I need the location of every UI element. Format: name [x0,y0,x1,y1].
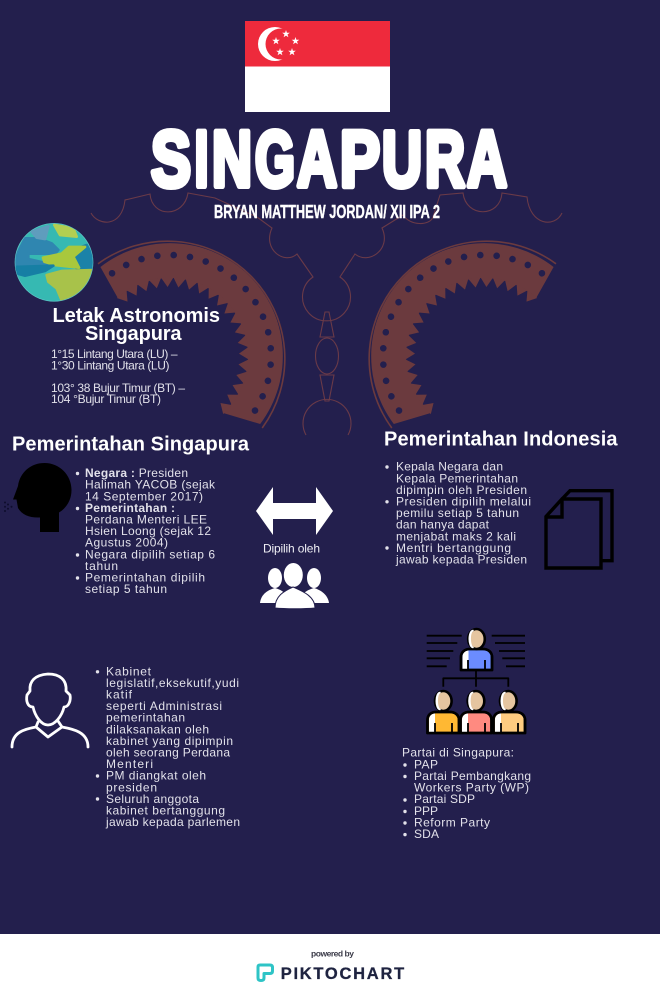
right person [494,691,525,733]
list: Singapore government: Negara dipilih setiap 6 [85,547,215,561]
list: Indonesian government: menjabat maks 2 kali [396,529,516,543]
list: Singapore government: Agustus 2004) [85,536,168,550]
title: A [297,114,337,203]
icon: head silhouette [4,463,72,532]
list: cabinet: Menteri [106,757,153,771]
list: Singapore government: Negara : Presiden [85,466,188,480]
list: Indonesian government: Mentri bertanggung [396,541,511,555]
footer [0,934,660,1000]
list: Singapore government: Hsien Loong (sejak 12 [85,524,211,538]
list: Indonesian government [385,460,531,566]
list: parties in Singapore: Partai SDP [414,792,475,806]
icon: documents [546,491,612,568]
list: Singapore government: Pemerintahan dipilih [85,571,205,585]
heading: Letak Astronomis: Letak Astronomis [52,305,220,327]
text: astronomical coordinates [51,347,185,406]
list: Singapore government: tahun [85,559,118,573]
list: Indonesian government: jawab kepada Presiden [395,552,527,566]
list: parties in Singapore: Partai di Singapura: [402,746,514,760]
title: R [425,114,465,203]
list: Singapore government: 14 September 2017) [85,489,203,503]
list: cabinet: kabinet yang dipimpin [106,734,233,748]
decorative gear outline [91,193,562,435]
list: cabinet: kabinet bertanggung [106,804,225,818]
list: Indonesian government: pemilu setiap 5 tahun [396,506,519,520]
list: cabinet: PM diangkat oleh [106,769,206,783]
right half gear [369,241,556,428]
list: parties in Singapore: PPP [414,804,438,818]
heading: Pemerintahan Indonesia: Pemerintahan Indonesia [384,429,618,451]
icon: Piktochart logo [258,965,272,980]
middle person [460,691,492,733]
list: cabinet: jawab kepada parlemen [105,815,240,829]
list: cabinet: presiden [106,780,157,794]
label: Dipilih oleh: Dipilih oleh [263,542,320,556]
list: parties in Singapore: Reform Party [414,815,490,829]
list: parties in Singapore [402,746,531,841]
list: cabinet: Kabinet [106,664,152,678]
list: cabinet: pemerintahan [106,711,185,725]
title: I [194,114,208,203]
list: cabinet: seperti Administrasi [106,699,222,713]
list: Singapore government: Halimah YACOB (sejak [85,478,216,492]
list: Indonesian government: dan hanya dapat [396,518,490,532]
left half gear [98,241,285,428]
arrow: double headed [256,487,333,535]
text: astronomical coordinates: 1°30 Lintang Utara (LU) [51,358,170,372]
list: Singapore government: setiap 5 tahun [85,582,167,596]
icon: globe [13,223,94,302]
heading: Letak Astronomis [52,305,220,345]
list: Singapore government: Perdana Menteri LEE [85,512,207,526]
list: Indonesian government: dipimpin oleh Presiden [396,483,527,497]
list: cabinet [96,664,240,829]
title [151,114,507,203]
title: N [212,114,252,203]
text: astronomical coordinates: 103° 38 Bujur Timur (BT) – [51,381,185,395]
list: parties in Singapore: Workers Party (WP) [414,781,529,795]
heading: Letak Astronomis: Singapura [85,323,182,345]
text: astronomical coordinates: 1°15 Lintang Utara (LU) – [51,347,178,361]
title: U [382,114,422,203]
heading: Pemerintahan Singapura: Pemerintahan Singapura [12,434,250,456]
title: A [467,114,507,203]
list: cabinet: legislatif,eksekutif,yudi [106,676,239,690]
list: Indonesian government: Presiden dipilih melalui [396,494,531,508]
list: parties in Singapore: Partai Pembangkang [414,769,531,783]
flag of Singapore [245,21,390,112]
powered by label: powered by [311,948,354,958]
icon: group of people [260,563,329,609]
list: Indonesian government: Kepala Pemerintahan [396,471,518,485]
left person [428,691,459,733]
icon: person outline [12,674,88,747]
title: G [255,114,295,203]
list: cabinet: dilaksanakan oleh [106,722,209,736]
list: Singapore government [76,466,216,596]
title: S [151,114,191,203]
title: P [340,114,380,203]
list: parties in Singapore: SDA [414,827,439,841]
icon: organisation chart [427,629,525,733]
Piktochart wordmark: PIKTOCHART [281,965,404,983]
list: cabinet: oleh seorang Perdana [106,746,230,760]
list: cabinet: Seluruh anggota [106,792,199,806]
list: cabinet: katif [106,688,133,702]
text: astronomical coordinates: 104 °Bujur Timur (BT) [51,392,161,406]
subtitle: BRYAN MATTHEW JORDAN/ XII IPA 2 [214,202,440,222]
list: Singapore government: Pemerintahan : [85,501,175,515]
list: Indonesian government: Kepala Negara dan [396,460,503,474]
list: parties in Singapore: PAP [414,757,438,771]
top person [461,629,492,670]
